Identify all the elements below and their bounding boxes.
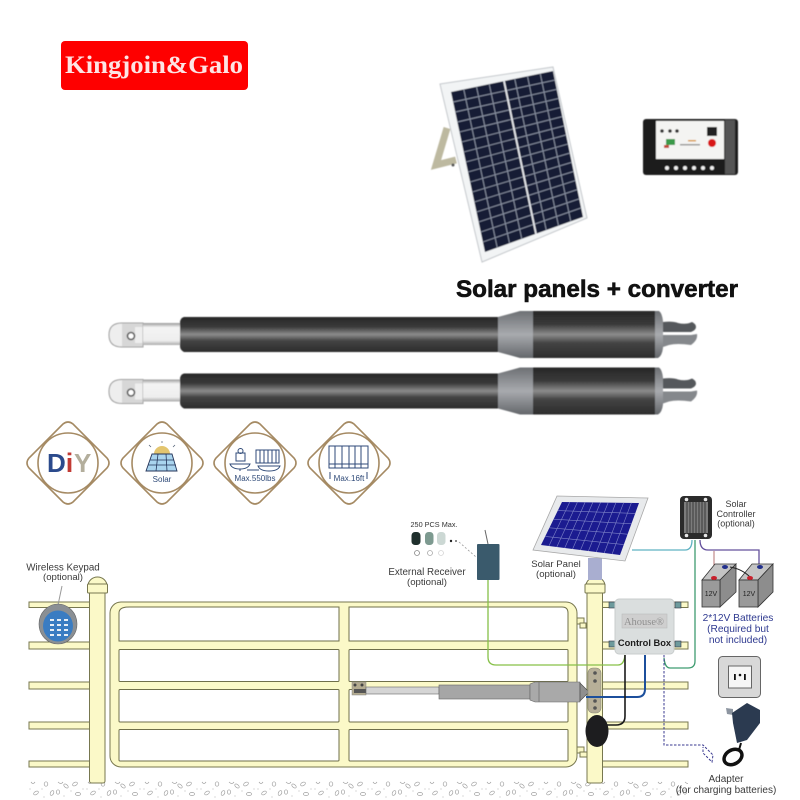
- batteries: 12V: [705, 591, 718, 598]
- external receiver box: [477, 530, 500, 580]
- label: adapter: Adapter: [708, 774, 744, 785]
- wire: light green receiver to control box: [488, 580, 625, 665]
- left gate post: [88, 577, 108, 783]
- remote controls: 250 PCS Max.: [410, 520, 458, 529]
- label: adapter: [676, 774, 776, 796]
- post bracket plate: [588, 668, 601, 713]
- keypad pointer: [58, 586, 62, 605]
- label: external receiver: External Receiver: [388, 567, 466, 578]
- icon: Max.550lbs: [214, 422, 296, 504]
- linear actuator, upper: [109, 311, 697, 358]
- wire: dashed charger line: [664, 655, 713, 762]
- label: solar panel: Solar Panel: [531, 559, 581, 570]
- icon: Max.550lbs: Max.550lbs: [235, 474, 275, 483]
- linear actuator, lower: [109, 368, 697, 414]
- fence rails right: [600, 602, 688, 767]
- wire: panel to solar controller: [632, 540, 692, 550]
- gate frame: [110, 602, 577, 767]
- heading: solar panels + converter: Solar panels + converter: [456, 276, 738, 303]
- wire: blue motor to control box: [586, 655, 645, 697]
- solar controller: [680, 496, 712, 539]
- label: solar panel: (optional): [536, 569, 576, 580]
- label: solar controller: Solar: [725, 499, 747, 509]
- fence rails left: [29, 602, 91, 767]
- wire: solar controller to battery positive: [713, 551, 715, 577]
- label: wireless keypad: (optional): [43, 572, 83, 583]
- control box: Ahouse®: [624, 617, 664, 628]
- icon: DIY: Y: [74, 448, 91, 478]
- brand badge: Kingjoin&Galo: [65, 52, 243, 79]
- batteries: [702, 564, 773, 607]
- gate hinges: [577, 618, 587, 757]
- wire: solar controller to battery negative: [700, 540, 759, 566]
- wire: green controller to control box: [664, 540, 695, 668]
- gate installation diagram: [28, 540, 713, 800]
- brand badge: [61, 41, 248, 90]
- solar charge controller photo: [643, 119, 738, 175]
- control box: Control Box: [618, 638, 672, 648]
- icon: DIY: [27, 422, 109, 504]
- icon: DIY: i: [66, 448, 73, 478]
- label: external receiver: [388, 567, 466, 588]
- ground gravel: [28, 780, 688, 800]
- small solar panel: [533, 496, 648, 580]
- icon: Solar: [121, 422, 203, 504]
- label: wireless keypad: Wireless Keypad: [26, 562, 100, 574]
- icon: power outlet: [718, 656, 760, 698]
- solar panel photo: [436, 67, 587, 262]
- icon: power adapter: [721, 703, 760, 768]
- label: solar controller: Controller: [716, 509, 756, 519]
- feature icons row: [27, 422, 390, 504]
- right gate post: [585, 577, 605, 783]
- icon: wireless keypad: [39, 604, 77, 644]
- icon: Max.16ft: Max.16ft: [334, 474, 365, 483]
- batteries: 12V: [743, 591, 756, 598]
- label: solar controller: (optional): [717, 518, 755, 528]
- label: adapter: (for charging batteries): [676, 785, 776, 796]
- label: batteries: (Required but: [707, 624, 769, 635]
- wire: black photocell to control box: [606, 655, 625, 725]
- control box: [609, 599, 681, 654]
- label: external receiver: (optional): [407, 577, 447, 588]
- label: solar panel: [531, 559, 581, 580]
- battery 1: [702, 564, 736, 607]
- remote controls: [410, 520, 476, 557]
- photocell: [586, 715, 608, 747]
- label: wireless keypad: [26, 562, 100, 583]
- icon: Solar: Solar: [153, 475, 172, 484]
- icon: Max.16ft: [308, 422, 390, 504]
- label: batteries: [703, 613, 773, 646]
- icon: DIY: D: [47, 448, 66, 478]
- label: batteries: 2*12V Batteries: [703, 613, 773, 624]
- label: batteries: not included): [709, 635, 767, 646]
- battery 2: [739, 564, 773, 607]
- actuator on the gate: [352, 682, 597, 702]
- label: solar controller: [716, 499, 756, 528]
